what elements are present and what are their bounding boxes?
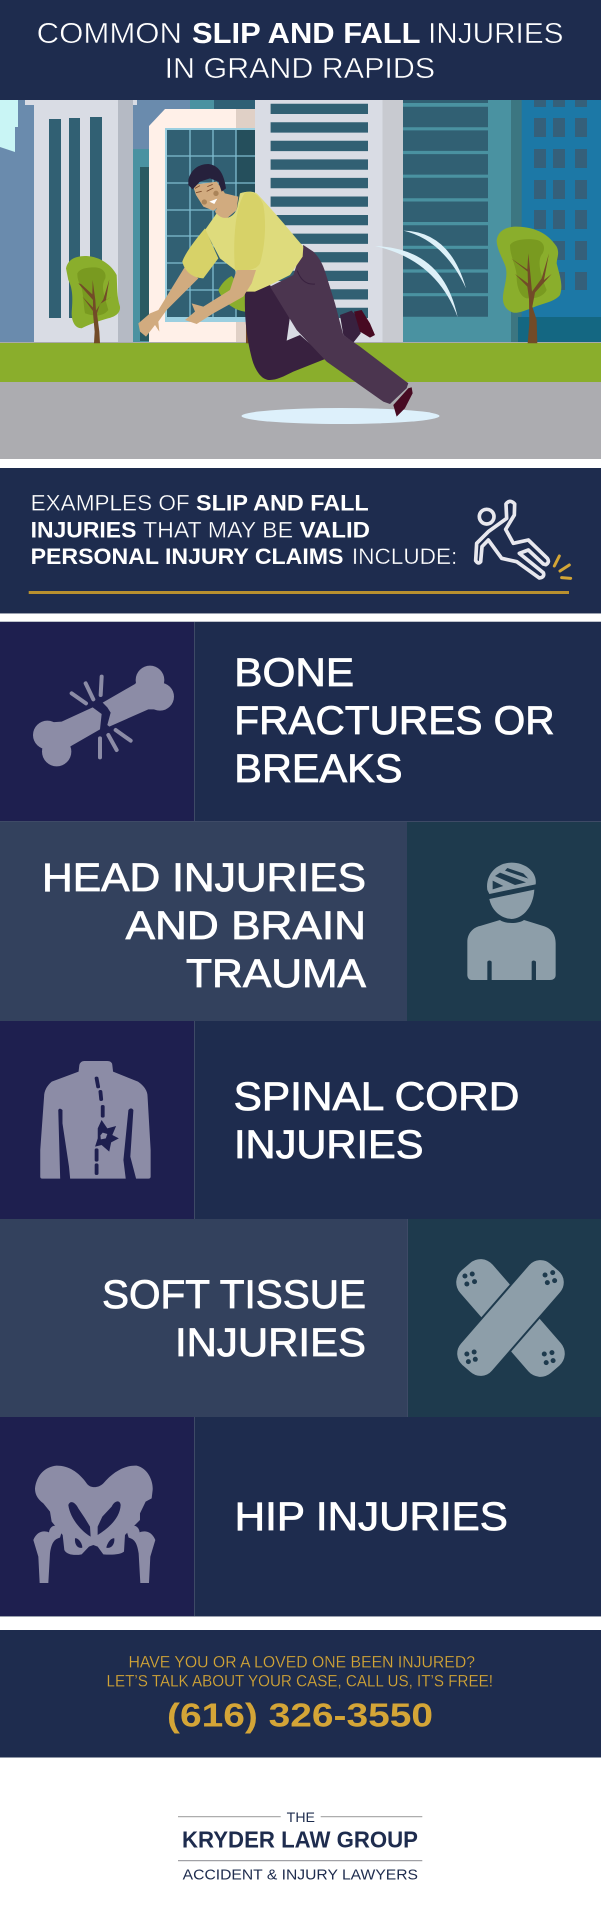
intro text: VALID	[300, 518, 370, 543]
heading: SPINAL CORD	[234, 1075, 519, 1119]
panel: intro statement	[0, 468, 601, 614]
icon: pelvis and hip bones	[33, 1466, 155, 1583]
heading	[234, 1075, 519, 1167]
tree right	[497, 227, 561, 343]
intro text: EXAMPLES OF	[31, 491, 190, 516]
panel: hip injuries	[0, 1417, 601, 1617]
heading: FRACTURES OR	[234, 699, 555, 743]
tree behind the man	[218, 276, 249, 343]
title banner: COMMON	[37, 18, 182, 50]
title banner	[0, 0, 601, 100]
heading: INJURIES	[175, 1321, 366, 1365]
call to action text: HAVE YOU OR A LOVED ONE BEEN INJURED?	[128, 1653, 475, 1671]
call to action text: LET’S TALK ABOUT YOUR CASE, CALL US, IT’S FREE!	[106, 1673, 493, 1691]
intro text: THAT MAY BE	[143, 518, 293, 543]
intro text: INJURIES	[31, 518, 136, 543]
call to action text	[106, 1653, 493, 1691]
heading: HIP INJURIES	[235, 1495, 508, 1539]
road	[0, 382, 601, 459]
title banner: IN GRAND RAPIDS	[165, 53, 435, 85]
icon: back with injured spine	[40, 1061, 151, 1179]
heading: AND BRAIN	[126, 904, 366, 948]
heading: INJURIES	[234, 1123, 424, 1167]
motion swooshes	[375, 231, 466, 317]
title banner: SLIP AND FALL	[192, 18, 420, 50]
icon: broken bone	[33, 666, 174, 766]
panel: spinal cord injuries	[0, 1021, 601, 1219]
icon: crossed bandages	[450, 1253, 571, 1383]
heading	[102, 1273, 366, 1365]
panel: head injuries	[0, 821, 601, 1021]
heading: BONE	[234, 651, 354, 695]
gold rule	[29, 591, 569, 594]
grass strip	[0, 342, 601, 382]
heading: TRAUMA	[186, 952, 366, 996]
logo: The Kryder Law Group	[178, 1810, 422, 1883]
heading: HEAD INJURIES	[42, 856, 366, 900]
man falling	[138, 164, 413, 417]
logo: The Kryder Law Group: ACCIDENT & INJURY LAWYERS	[183, 1867, 418, 1883]
intro text: SLIP AND FALL	[196, 491, 369, 516]
heading	[234, 651, 555, 791]
heading	[42, 856, 366, 996]
heading: BREAKS	[234, 747, 402, 791]
city buildings background	[0, 100, 601, 343]
icon: bandaged head	[467, 863, 556, 980]
panel: bone fractures	[0, 621, 601, 821]
logo: The Kryder Law Group: KRYDER LAW GROUP	[182, 1827, 418, 1853]
panel: soft tissue injuries	[0, 1219, 601, 1417]
heading: SOFT TISSUE	[102, 1273, 366, 1317]
tree left	[66, 256, 120, 343]
title banner: INJURIES	[428, 18, 564, 50]
intro text	[31, 491, 457, 569]
illustration: man slipping on a puddle in front of city buildings	[0, 100, 601, 459]
panel: call to action	[0, 1630, 601, 1758]
logo: The Kryder Law Group: THE	[287, 1810, 315, 1825]
intro text: PERSONAL INJURY CLAIMS	[31, 544, 343, 569]
icon: person slipping	[476, 501, 571, 578]
puddle	[242, 408, 440, 424]
intro text: INCLUDE:	[352, 544, 457, 569]
phone number: (616) 326-3550	[167, 1697, 433, 1734]
